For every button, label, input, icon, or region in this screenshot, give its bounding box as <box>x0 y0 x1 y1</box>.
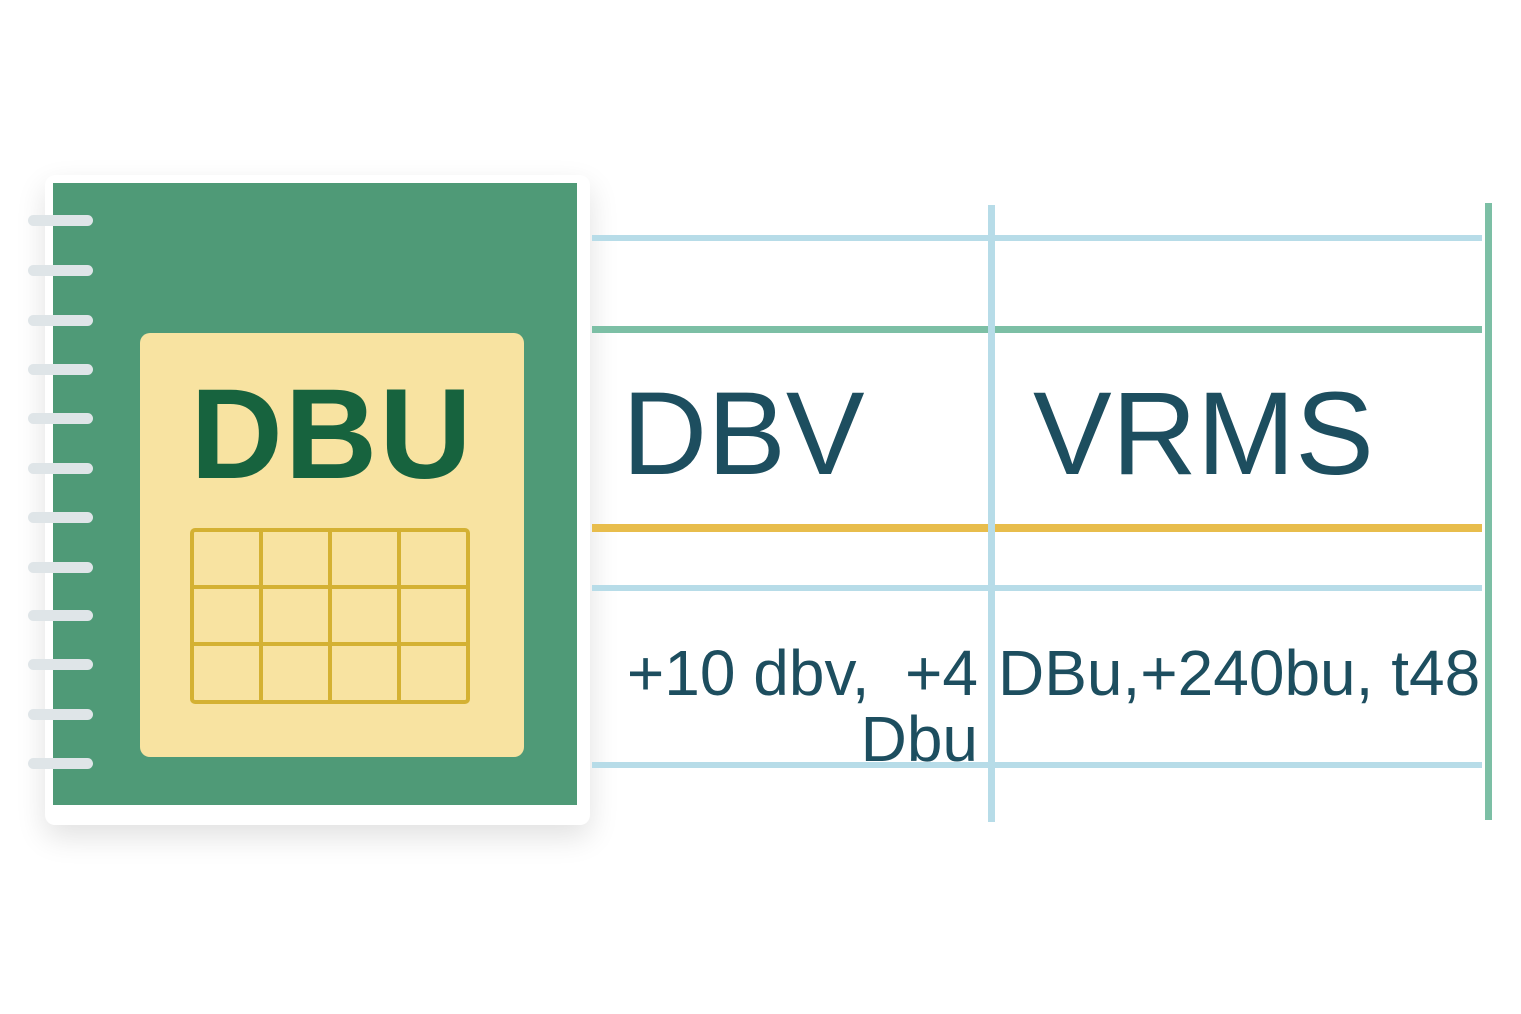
spiral rings <box>28 215 93 769</box>
header: DBV: DBV <box>622 368 865 500</box>
card title: DBU <box>190 363 474 506</box>
notebook <box>45 175 590 825</box>
icon: grid table <box>190 528 470 704</box>
cell: dbv values: Dbu <box>861 703 978 775</box>
cell: dbv values: +10 dbv, +4 <box>627 637 978 709</box>
label card <box>140 333 524 757</box>
cell: dbv values <box>627 637 978 775</box>
table <box>592 203 1492 822</box>
notebook cover <box>53 183 577 805</box>
cell: vrms values: DBu,+240bu, t48 <box>998 637 1480 709</box>
header: VRMS: VRMS <box>1033 368 1374 500</box>
